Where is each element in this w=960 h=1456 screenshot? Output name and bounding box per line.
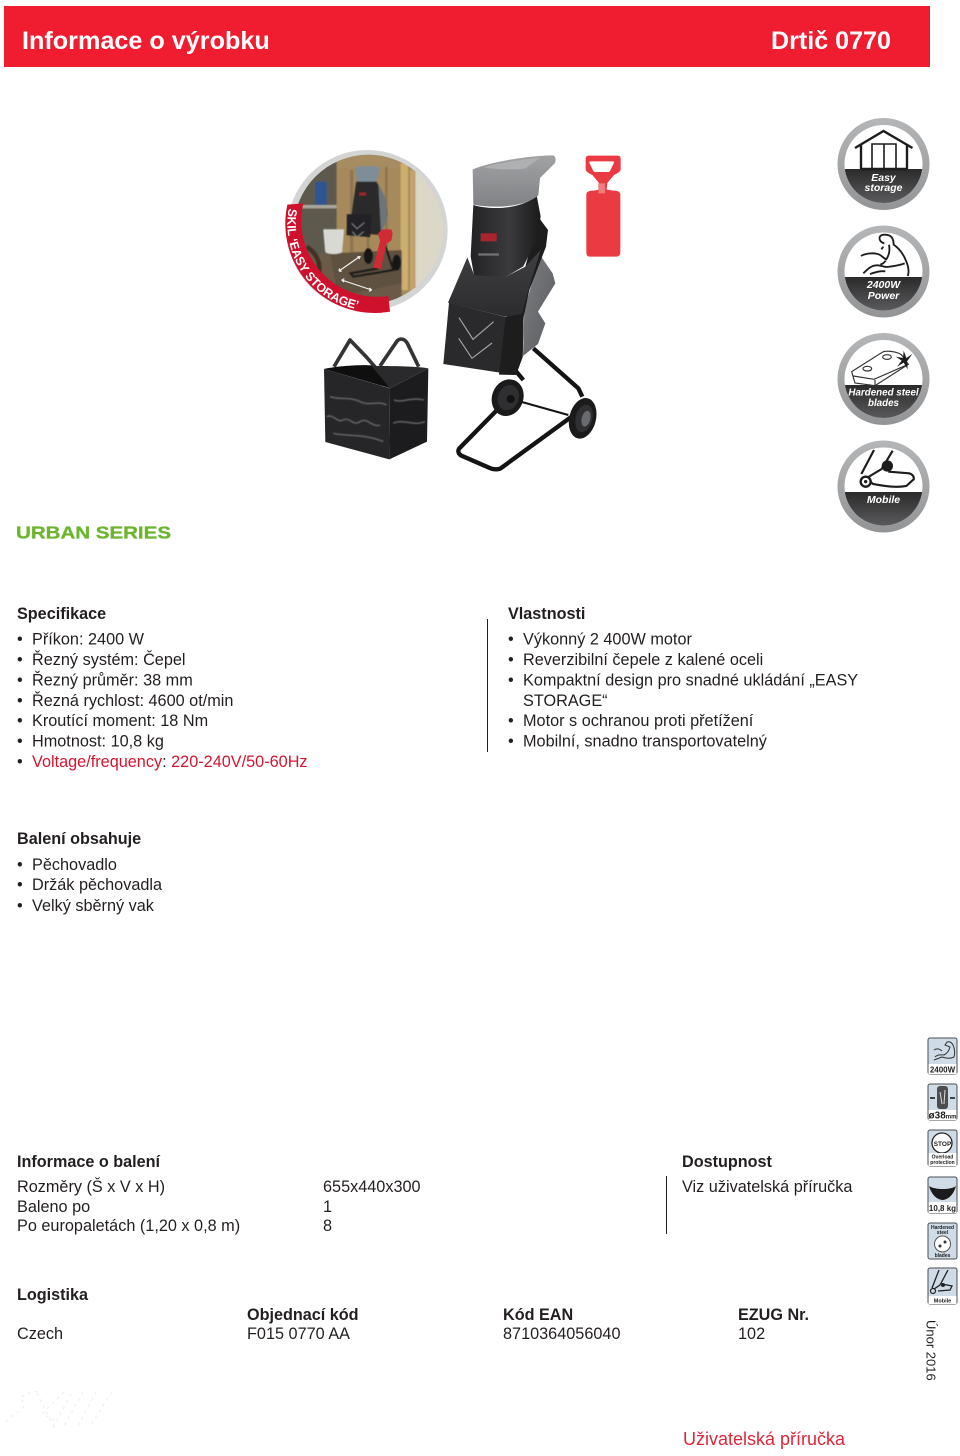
- small spec icon: weight 10.8 kg: 10,8 kg: [929, 1204, 956, 1213]
- specification list: •: [17, 692, 23, 710]
- side grey housing: [523, 255, 555, 356]
- small spec icon: overload protection: STOP: [934, 1141, 952, 1148]
- features section: [487, 605, 858, 752]
- specification list: Voltage/frequency: 220-240V/50-60Hz: [32, 753, 308, 771]
- packaging information table: 8: [323, 1217, 332, 1235]
- skil logo on body: [481, 233, 497, 241]
- faint SKIL watermark: [6, 1391, 112, 1429]
- feature list: STORAGE“: [523, 692, 608, 710]
- logistics table: 8710364056040: [503, 1325, 620, 1343]
- contents list: Pěchovadlo: [32, 856, 117, 874]
- heading: specifikace: Specifikace: [17, 605, 106, 623]
- availability section: Viz uživatelská příručka: [682, 1178, 853, 1196]
- small spec icon: weight 10.8 kg: [928, 1177, 957, 1213]
- series label: URBAN SERIES: [16, 522, 171, 542]
- product: collection bag: [324, 339, 428, 459]
- small spec icon: overload protection: [928, 1130, 957, 1166]
- small spec icon: overload protection: protection: [930, 1160, 955, 1166]
- benefit badge: easy storage: Easy: [871, 172, 897, 184]
- specifications section: [17, 605, 308, 771]
- benefit badge: mobile: [838, 440, 930, 532]
- small spec icon: 2400W: [928, 1038, 957, 1074]
- benefit badge: hardened steel blades: [838, 333, 930, 425]
- title: Informace o výrobku: [22, 27, 270, 55]
- specification list: [17, 630, 308, 771]
- small spec icon: mobile: [928, 1268, 957, 1304]
- rear black spine: [513, 217, 548, 318]
- frame and wheels: [458, 348, 601, 469]
- feature list: •: [508, 732, 514, 750]
- icon: frame and wheels: [861, 450, 914, 487]
- small spec icon: overload protection: Overload: [932, 1154, 953, 1160]
- benefit badge: 2400W power: [838, 226, 930, 318]
- small spec icon: diameter 38 mm: ø38mm: [929, 1110, 956, 1122]
- inset photo: easy storage: [285, 150, 448, 313]
- feature list: •: [508, 712, 514, 730]
- product: red tamper: [586, 156, 621, 257]
- contents list: •: [17, 856, 23, 874]
- specification list: Řezný průměr: 38 mm: [32, 670, 193, 690]
- feature list: [508, 630, 858, 750]
- specification list: •: [17, 753, 23, 771]
- packaging information table: [17, 1153, 421, 1235]
- header banner: [4, 6, 930, 67]
- product images: [285, 150, 621, 472]
- package contents section: [17, 830, 163, 915]
- motor body: [471, 196, 541, 278]
- feature list: •: [508, 651, 514, 669]
- heading: dostupnost: Dostupnost: [682, 1153, 773, 1171]
- specification list: Řezný systém: Čepel: [32, 650, 186, 669]
- logistics table: Czech: [17, 1325, 63, 1343]
- logistics table: Kód EAN: [503, 1306, 573, 1324]
- heading: balení obsahuje: Balení obsahuje: [17, 830, 141, 848]
- contents list: •: [17, 897, 23, 915]
- product: garden shredder: [443, 155, 601, 469]
- heading: vlastnosti: Vlastnosti: [508, 605, 585, 623]
- specification list: Příkon: 2400 W: [32, 630, 145, 648]
- model name: Drtič 0770: [771, 27, 891, 55]
- logistics table: F015 0770 AA: [247, 1325, 350, 1343]
- packaging information table: Po europaletách (1,20 x 0,8 m): [17, 1217, 240, 1235]
- benefit badge: hardened steel blades: Hardened steel: [848, 388, 919, 398]
- benefit badge: hardened steel blades: blades: [868, 398, 900, 409]
- chute upper panel: [448, 250, 541, 317]
- icon: blade with spark: [852, 351, 912, 386]
- icon: flexed arm: [861, 235, 909, 276]
- specification list: Řezná rychlost: 4600 ot/min: [32, 691, 233, 710]
- logistics table: [17, 1286, 809, 1343]
- logistics table: 102: [738, 1325, 765, 1343]
- specification list: •: [17, 732, 23, 750]
- feature list: Kompaktní design pro snadné ukládání „EASY: [523, 672, 858, 690]
- packaging information table: 1: [323, 1198, 332, 1216]
- icon: shed: [855, 131, 912, 169]
- feature list: •: [508, 630, 514, 648]
- packaging information table: Baleno po: [17, 1198, 90, 1216]
- small spec icon: mobile: Mobile: [934, 1298, 951, 1304]
- footer link: user manual: Uživatelská příručka: [683, 1429, 846, 1449]
- specification list: •: [17, 712, 23, 730]
- hopper: [473, 155, 556, 207]
- small spec icon: hardened steel blades: blades: [935, 1253, 951, 1259]
- contents list: •: [17, 876, 23, 894]
- small spec icon: hardened steel blades: [928, 1223, 957, 1259]
- feature list: Mobilní, snadno transportovatelný: [523, 732, 768, 750]
- benefit badge: 2400W power: 2400W: [866, 279, 901, 291]
- feature list: Výkonný 2 400W motor: [523, 630, 692, 648]
- inset ribbon label: SKIL ‘EASY STORAGE’: [287, 208, 359, 309]
- availability section: [666, 1153, 853, 1234]
- specification list: •: [17, 672, 23, 690]
- benefit badge: easy storage: [838, 118, 930, 210]
- small spec icon: hardened steel blades: steel: [937, 1230, 949, 1236]
- contents list: Držák pěchovadla: [32, 876, 163, 894]
- contents list: Velký sběrný vak: [32, 897, 155, 915]
- date: Únor 2016: [924, 1320, 938, 1381]
- small spec icon: 2400W: 2400W: [930, 1066, 956, 1074]
- feature list: •: [508, 672, 514, 690]
- benefit badge: easy storage: storage: [865, 182, 903, 194]
- specification list: •: [17, 630, 23, 648]
- benefit badge: 2400W power: Power: [868, 290, 900, 302]
- contents list: [17, 856, 163, 915]
- heading: informace o balení: Informace o balení: [17, 1153, 161, 1171]
- heading: logistika: Logistika: [17, 1286, 89, 1304]
- benefit badge: mobile: Mobile: [867, 494, 900, 506]
- small spec icon: diameter 38 mm: [928, 1084, 957, 1122]
- logistics table: Objednací kód: [247, 1306, 359, 1324]
- specification list: •: [17, 651, 23, 669]
- specification list: Hmotnost: 10,8 kg: [32, 732, 164, 750]
- logistics table: EZUG Nr.: [738, 1306, 809, 1324]
- chute front panel: [443, 303, 524, 375]
- specification list: Kroutící moment: 18 Nm: [32, 712, 208, 730]
- packaging information table: 655x440x300: [323, 1178, 421, 1196]
- feature list: Motor s ochranou proti přetížení: [523, 712, 754, 730]
- inset ribbon label: [285, 203, 390, 313]
- packaging information table: Rozměry (Š x V x H): [17, 1177, 165, 1196]
- feature list: Reverzibilní čepele z kalené oceli: [523, 651, 763, 669]
- small spec icon: hardened steel blades: Hardened: [931, 1225, 954, 1231]
